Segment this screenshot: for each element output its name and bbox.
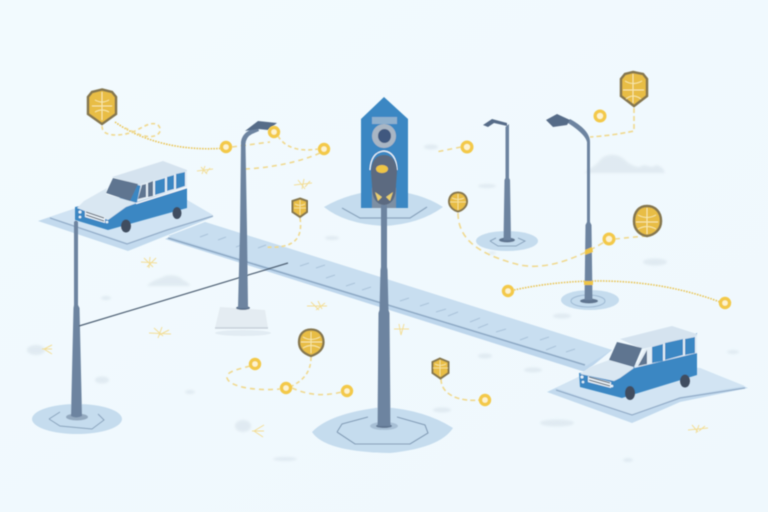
big lamp post <box>312 155 453 453</box>
yellow starbursts <box>42 166 708 437</box>
lamp post: fourth <box>546 114 619 310</box>
tower sensor bar <box>372 117 397 124</box>
signal tower <box>361 97 408 208</box>
car: right <box>579 326 697 400</box>
badge 2 <box>621 72 647 106</box>
left platform <box>38 190 213 251</box>
lamp post: left <box>32 220 288 434</box>
badge 7 <box>432 358 448 378</box>
road <box>165 222 612 372</box>
badge 6 <box>299 330 324 356</box>
badge 1 <box>88 90 116 124</box>
badge 3 <box>634 206 661 236</box>
tower camera <box>372 124 396 148</box>
lamp post: second with plinth <box>215 121 277 336</box>
connection nodes <box>222 111 730 404</box>
badge 5 <box>449 192 467 212</box>
connector paths <box>102 108 720 400</box>
background clouds <box>27 144 739 462</box>
lamp post: third <box>476 119 538 251</box>
tower base <box>324 190 443 226</box>
badge 4 <box>292 198 307 217</box>
car: left <box>75 161 187 232</box>
right platform <box>547 362 748 423</box>
